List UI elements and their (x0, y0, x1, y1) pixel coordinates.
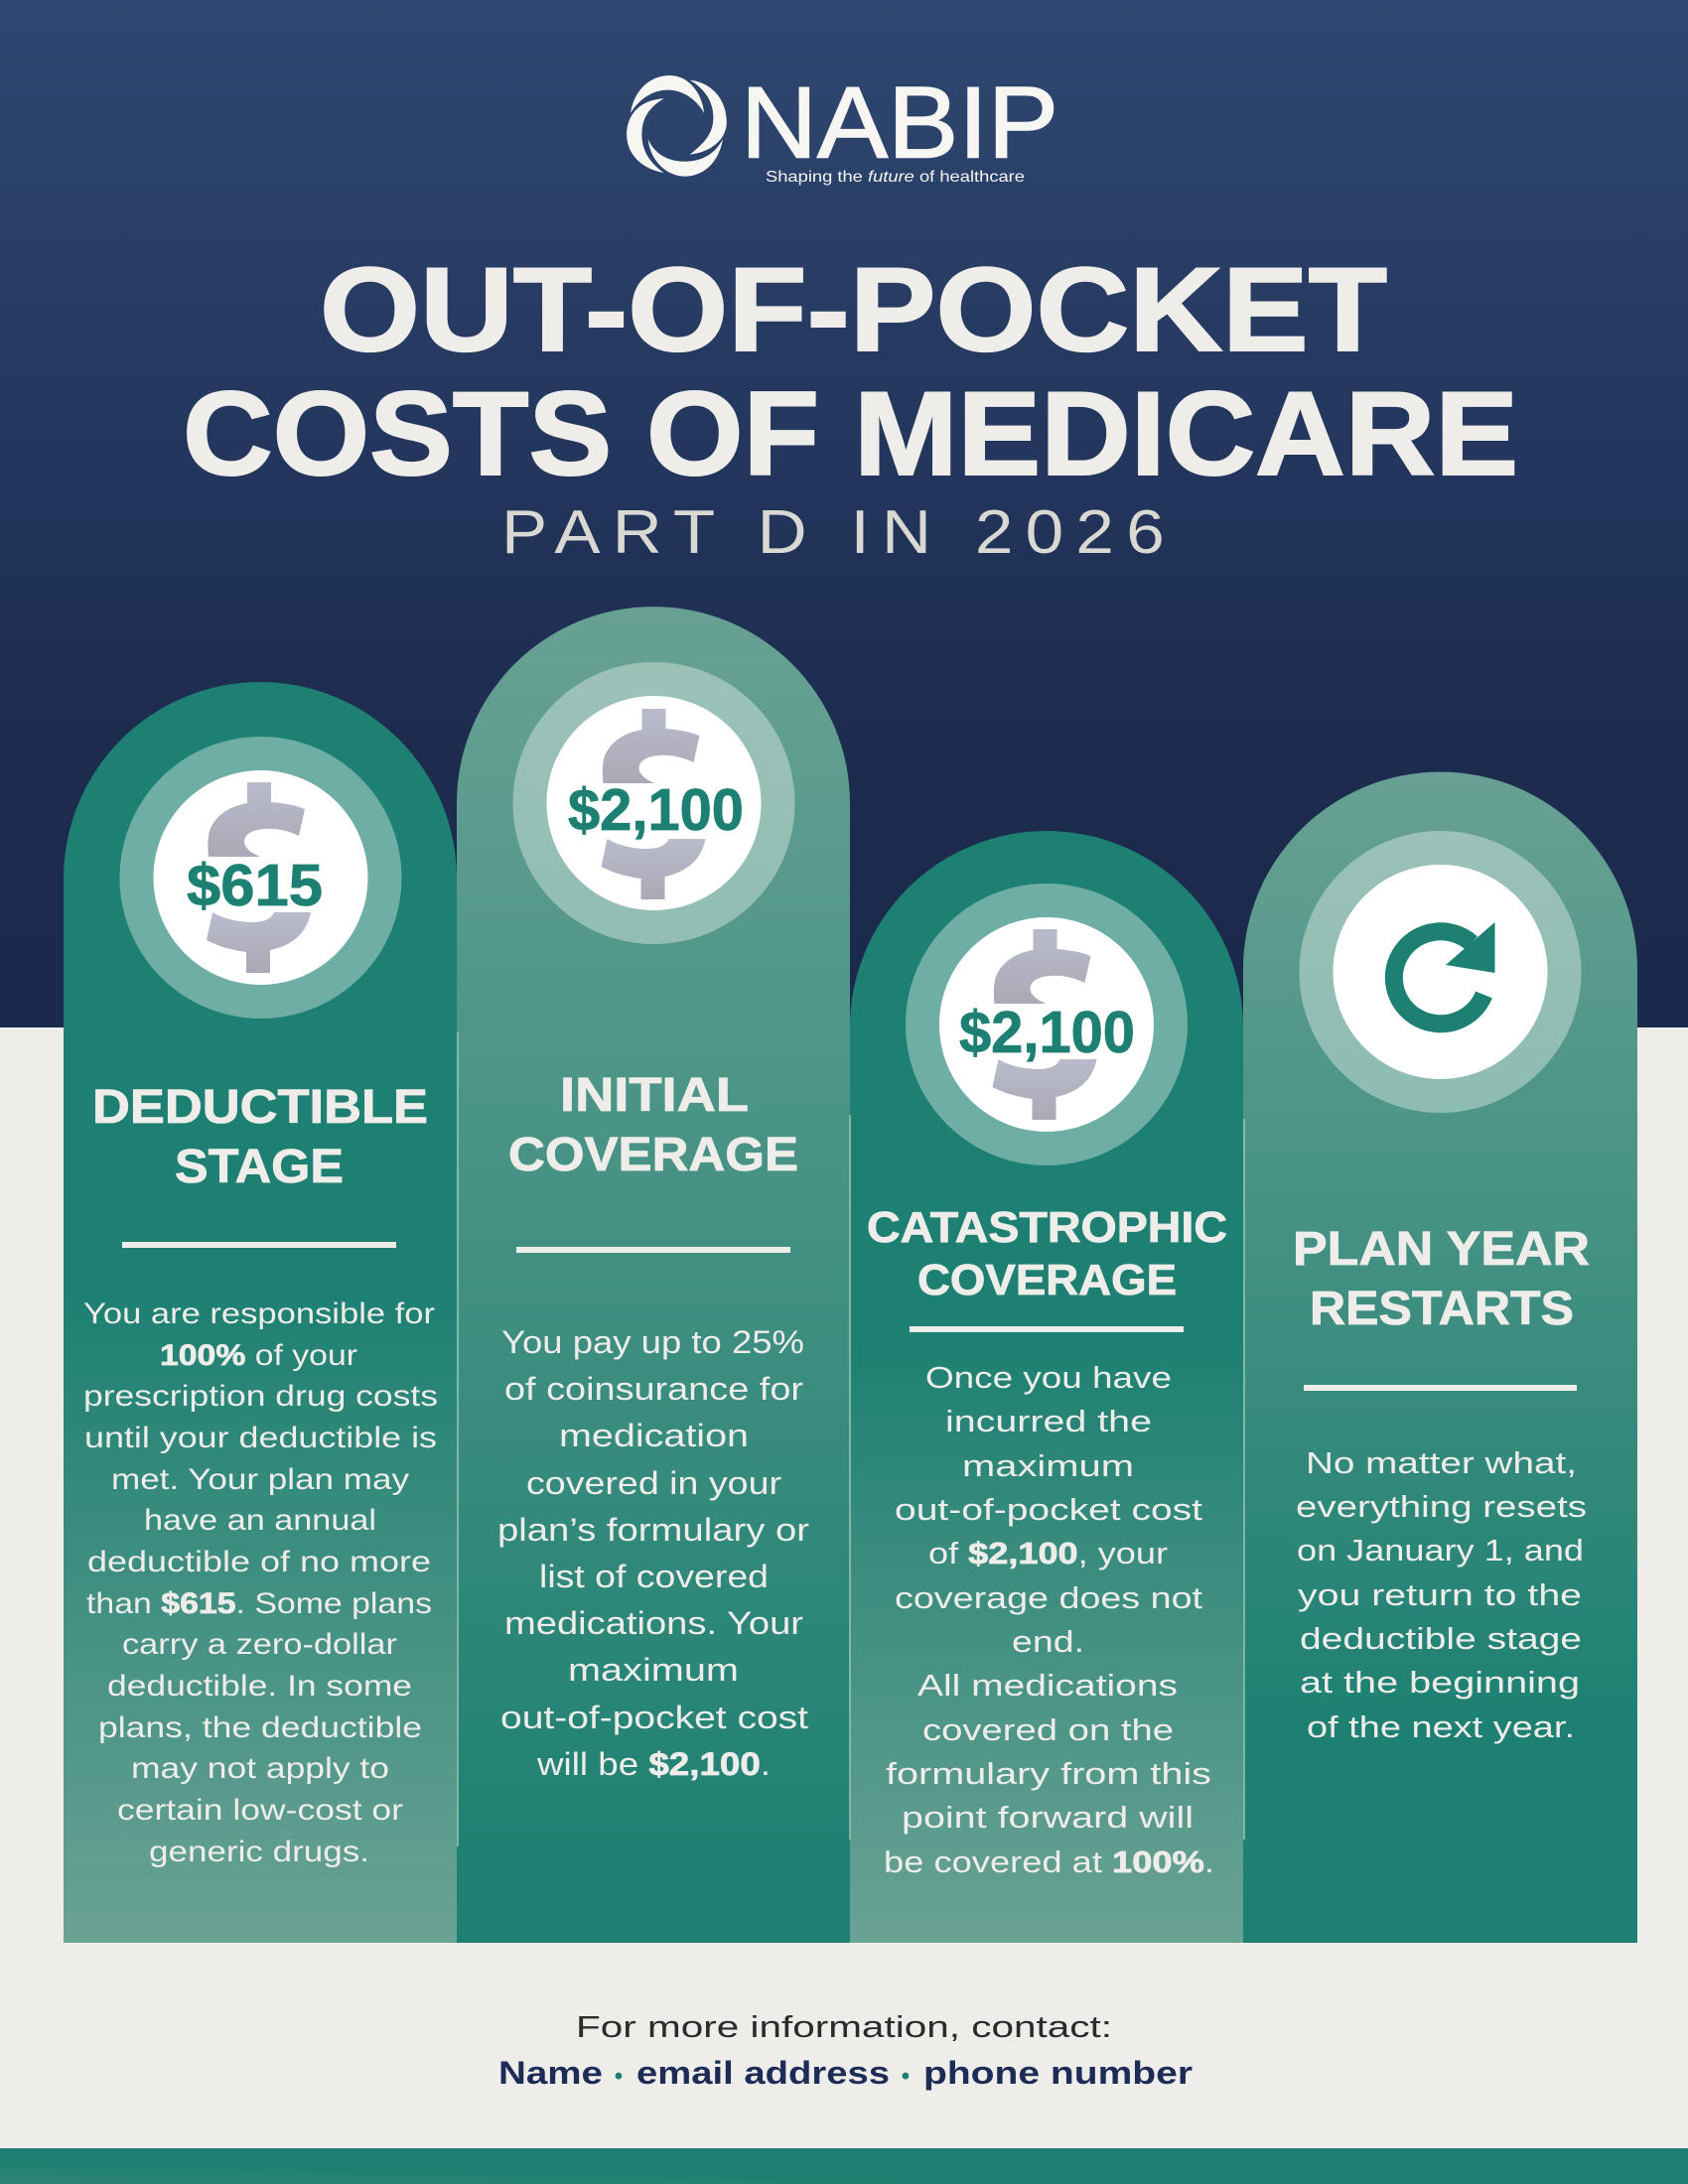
body text: You are responsible for (83, 1297, 435, 1330)
navy header background (0, 0, 1688, 1027)
body text: on January 1, and (1297, 1533, 1584, 1568)
contact text (498, 2009, 1193, 2091)
heading: INITIAL (560, 1069, 749, 1122)
contact details: • (902, 2063, 910, 2090)
body text: of the next year. (1307, 1709, 1575, 1744)
body text: maximum (962, 1448, 1134, 1483)
body text: deductible stage (1300, 1621, 1582, 1656)
body text: may not apply to (131, 1752, 389, 1785)
body text: be covered at 100% . (884, 1844, 1214, 1879)
heading: PLAN YEAR (1293, 1223, 1590, 1276)
body text (497, 1324, 809, 1782)
body text: list of covered (539, 1559, 769, 1594)
heading (92, 1081, 428, 1193)
body text: plan’s formulary or (497, 1512, 809, 1548)
body text: out-of-pocket cost (500, 1700, 808, 1735)
heading (1293, 1223, 1590, 1335)
body text: you return to the (1298, 1577, 1582, 1612)
body text: formulary from this (886, 1756, 1211, 1791)
icon: dollar badge $2,100 (512, 662, 794, 944)
title: COSTS OF MEDICARE (183, 367, 1518, 500)
heading: STAGE (175, 1141, 344, 1193)
body text: have an annual (144, 1504, 376, 1537)
heading: DEDUCTIBLE (92, 1081, 428, 1134)
body text: carry a zero-dollar (122, 1628, 397, 1661)
subtitle: PART D IN 2026 (501, 498, 1177, 567)
body text: medications. Your (504, 1605, 803, 1641)
body text: 100% of your (160, 1339, 357, 1372)
body text: covered in your (526, 1465, 781, 1501)
body text: medication (559, 1418, 749, 1453)
body text: covered on the (922, 1712, 1174, 1747)
title (183, 243, 1518, 500)
panel: plan year restarts (1243, 771, 1637, 1943)
panel: deductible stage (64, 682, 457, 1943)
body text: plans, the deductible (98, 1711, 422, 1744)
body text: deductible. In some (107, 1670, 412, 1703)
icon: swirl ring (627, 75, 727, 177)
body text: point forward will (902, 1800, 1194, 1835)
footer band (0, 2148, 1688, 2184)
icon: dollar badge $2,100: $2,100 (568, 777, 744, 843)
logo wordmark: NABIP (741, 66, 1058, 179)
heading: RESTARTS (1310, 1283, 1574, 1335)
body text: certain low-cost or (117, 1794, 403, 1827)
logo tagline: Shaping the future of healthcare (766, 169, 1025, 186)
panel: initial coverage (457, 607, 850, 1943)
body text (83, 1297, 438, 1868)
body text: at the beginning (1300, 1665, 1580, 1700)
heading (508, 1069, 798, 1181)
contact text: For more information, contact: (576, 2009, 1112, 2044)
body text: maximum (568, 1652, 739, 1688)
body text: coverage does not (895, 1580, 1202, 1615)
contact details (498, 2055, 1193, 2091)
title: OUT-OF-POCKET (320, 243, 1387, 376)
logo: NABIP (627, 66, 1058, 186)
body text: All medications (917, 1668, 1178, 1703)
body text: met. Your plan may (111, 1463, 409, 1496)
body text (1296, 1445, 1587, 1744)
icon: dollar badge $615: $615 (187, 853, 323, 918)
body text: everything resets (1296, 1489, 1587, 1524)
body text: than $615 . Some plans (86, 1587, 432, 1620)
contact details: phone number (923, 2055, 1193, 2091)
body text: Once you have (925, 1360, 1172, 1395)
body text: of $2,100 , your (928, 1536, 1168, 1570)
icon: dollar badge $615 (119, 737, 401, 1019)
contact details: Name (498, 2055, 603, 2091)
body text: incurred the (945, 1404, 1152, 1438)
body text: prescription drug costs (83, 1380, 438, 1413)
body text: No matter what, (1306, 1445, 1577, 1480)
panel: catastrophic coverage (850, 831, 1243, 1943)
body text: generic drugs. (149, 1836, 369, 1868)
body text (884, 1360, 1214, 1879)
panel background (64, 682, 457, 1943)
icon: restart arrow badge (1299, 831, 1581, 1113)
heading (867, 1203, 1227, 1304)
heading: COVERAGE (508, 1129, 798, 1181)
body text: of coinsurance for (504, 1371, 803, 1407)
body text: will be $2,100 . (536, 1746, 771, 1782)
icon: dollar badge $2,100 (906, 884, 1188, 1165)
body text: end. (1012, 1624, 1084, 1659)
panel background (457, 607, 850, 1943)
heading: CATASTROPHIC (867, 1203, 1227, 1252)
contact details: • (615, 2063, 623, 2090)
body text: deductible of no more (87, 1546, 431, 1578)
icon: dollar badge $2,100: $2,100 (959, 1000, 1135, 1065)
contact details: email address (636, 2055, 890, 2091)
heading: COVERAGE (917, 1256, 1177, 1304)
panel background (850, 831, 1243, 1943)
body text: until your deductible is (84, 1422, 437, 1454)
body text: You pay up to 25% (501, 1324, 804, 1360)
body text: out-of-pocket cost (895, 1492, 1202, 1527)
panel background (1243, 771, 1637, 1943)
